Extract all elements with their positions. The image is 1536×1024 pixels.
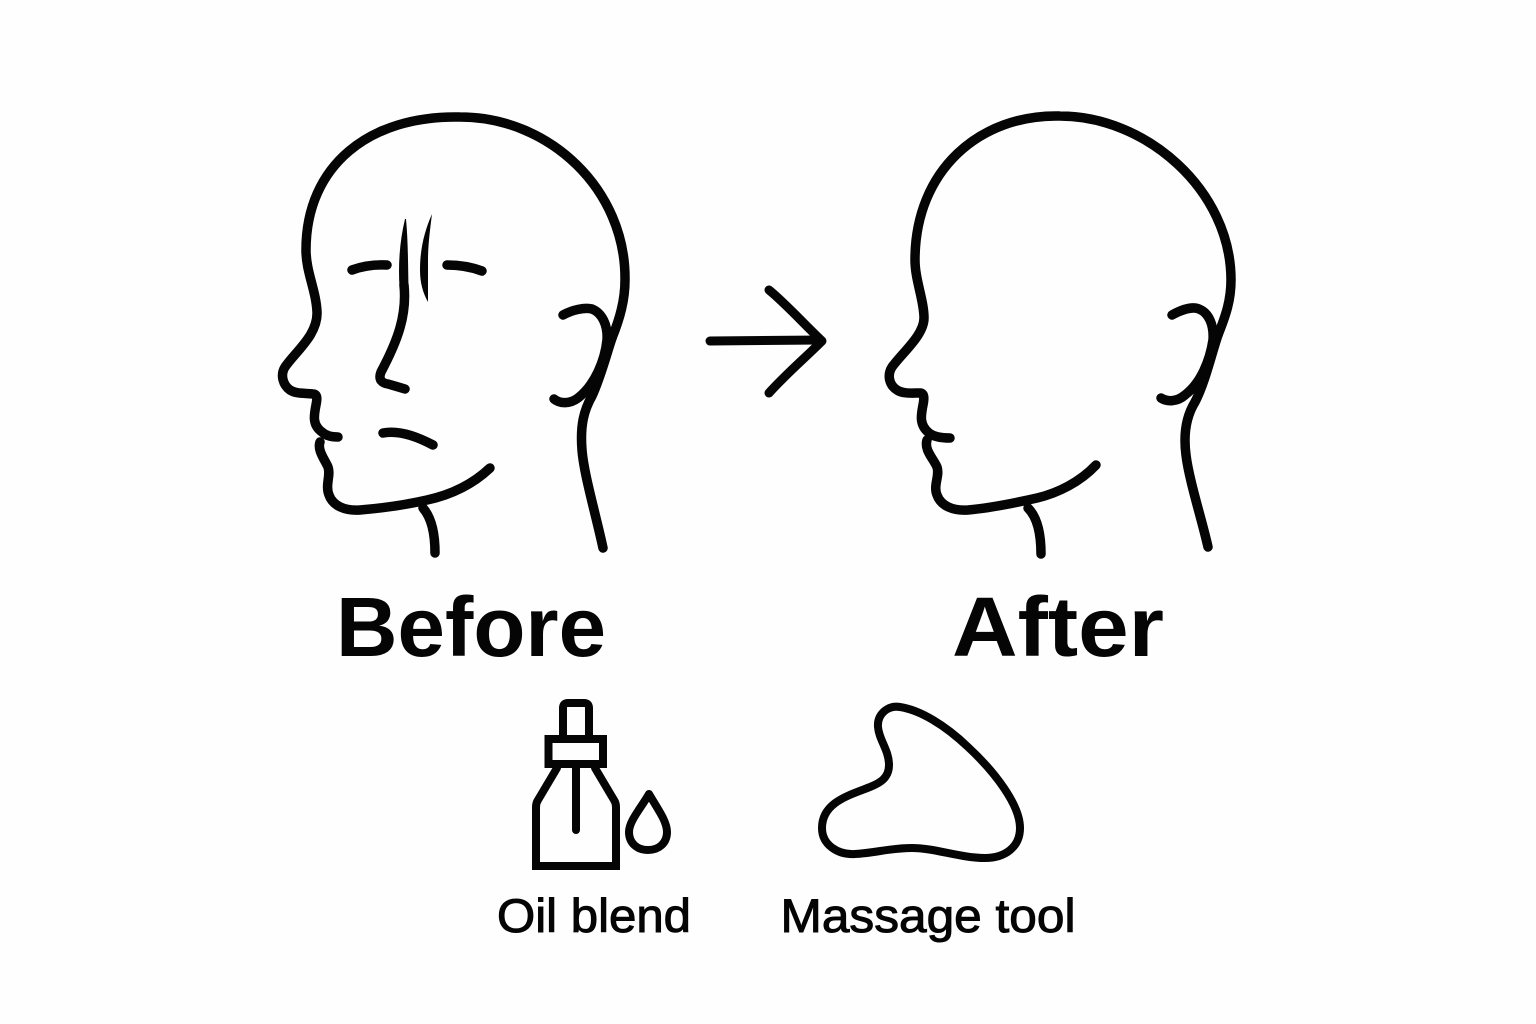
nose line (380, 219, 408, 389)
before ear (554, 308, 607, 403)
icon: oil bottle with drop (536, 703, 667, 866)
before head outline (283, 117, 625, 553)
label: Massage tool: Massage tool (780, 889, 1076, 942)
dropper cap (563, 703, 589, 737)
frown line (383, 432, 433, 445)
arrow (710, 290, 822, 393)
forehead wrinkle (420, 214, 432, 302)
after head outline (889, 116, 1231, 554)
before head with wrinkles (283, 117, 625, 553)
dropper stem (572, 766, 580, 830)
icon: massage tool (822, 707, 1020, 858)
label: After: After (952, 580, 1164, 674)
oil drop (629, 794, 667, 850)
right eyebrow (447, 265, 482, 271)
left eyebrow (352, 265, 387, 270)
label: Before: Before (336, 580, 606, 674)
collar (548, 739, 603, 764)
after ear (1161, 308, 1213, 401)
after head (889, 116, 1231, 554)
bottle body (536, 768, 616, 866)
label: Oil blend: Oil blend (497, 889, 691, 942)
